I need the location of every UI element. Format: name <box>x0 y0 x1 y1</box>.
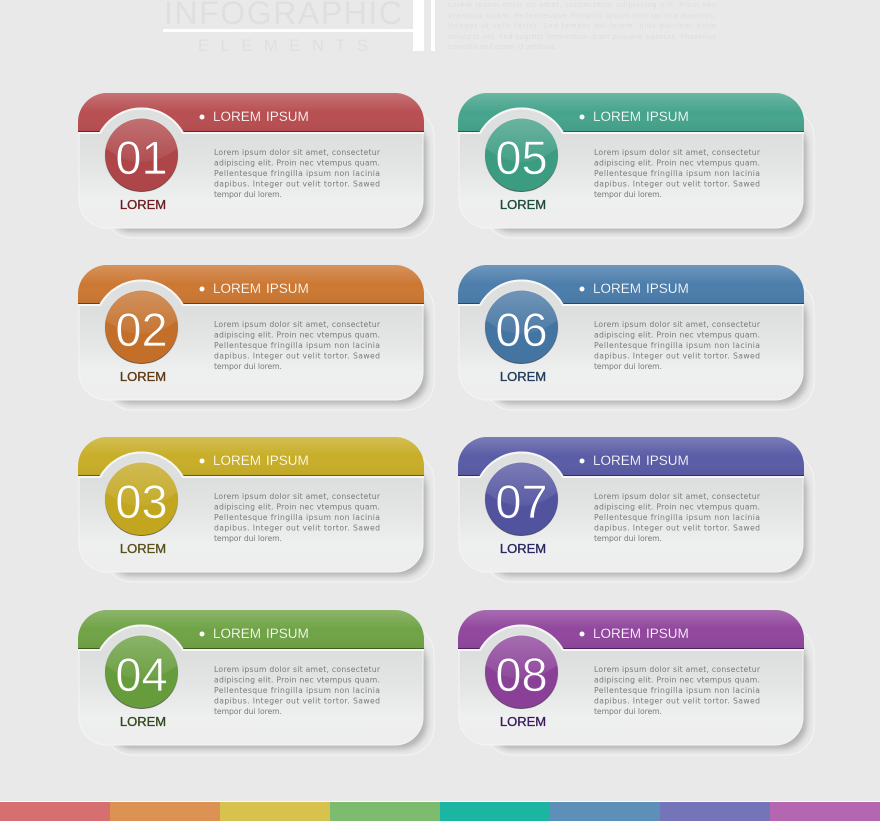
badge ring <box>480 282 563 306</box>
panel: 07 indigo: IPSUM <box>646 453 689 468</box>
header title <box>580 632 584 636</box>
intro paragraph <box>448 1 716 51</box>
panel: 02 orange: 02 <box>115 303 168 356</box>
body text: Pellentesque fringilla ipsum non lacinia <box>594 341 760 350</box>
badge ring <box>480 110 563 134</box>
body text: Pellentesque fringilla ipsum non lacinia <box>594 169 760 178</box>
body text: adipiscing elit. Proin nec vtempus quam. <box>594 676 760 684</box>
header band <box>458 93 804 132</box>
body text <box>594 665 761 716</box>
panel: 08 purple <box>458 610 814 755</box>
number badge <box>485 290 558 364</box>
panel: 04 green <box>78 610 434 755</box>
body text: Pellentesque fringilla ipsum non lacinia <box>214 513 380 522</box>
header band <box>78 437 424 476</box>
badge ring <box>100 454 183 478</box>
body text: Lorem ipsum dolor sit amet, consectetur <box>594 148 761 157</box>
body text: Pellentesque fringilla ipsum non lacinia <box>594 513 760 522</box>
panel: 02 orange: LOREM <box>213 281 261 296</box>
panel: 07 indigo <box>458 437 814 582</box>
body text: tempor dui lorem. <box>594 190 662 199</box>
body text: adipiscing elit. Proin nec vtempus quam. <box>594 330 760 340</box>
badge ring <box>480 627 563 651</box>
body text: Lorem ipsum dolor sit amet, consectetur <box>214 320 381 329</box>
panel: 02 orange: IPSUM <box>266 281 309 296</box>
body text: adipiscing elit. Proin nec vtempus quam. <box>214 158 380 168</box>
panel: 03 yellow <box>78 437 434 582</box>
number badge <box>105 636 178 708</box>
body text <box>594 320 761 371</box>
badge label: LOREM <box>120 541 166 556</box>
intro paragraph: volutpat vel. Sed sagittis fermentum diam posuere egestas. Phasellus <box>448 33 716 41</box>
badge label: LOREM <box>120 714 166 729</box>
body text: Lorem ipsum dolor sit amet, consectetur <box>214 148 381 157</box>
title block <box>163 0 716 55</box>
body text: Lorem ipsum dolor sit amet, consectetur <box>594 492 761 501</box>
body text <box>594 148 761 199</box>
body text: adipiscing elit. Proin nec vtempus quam. <box>594 158 760 168</box>
body text: Pellentesque fringilla ipsum non lacinia <box>214 686 380 695</box>
header band <box>78 265 424 304</box>
panel: 02 orange <box>78 265 434 410</box>
body text: adipiscing elit. Proin nec vtempus quam. <box>214 502 380 512</box>
number badge <box>485 118 558 192</box>
panel: 05 teal: IPSUM <box>646 109 689 124</box>
body text: dapibus. Integer out velit tortor. Sawed <box>594 696 760 706</box>
body text: adipiscing elit. Proin nec vtempus quam. <box>214 330 380 340</box>
panel: 01 red: 01 <box>115 131 168 184</box>
panel: 03 yellow: IPSUM <box>266 453 309 468</box>
body text <box>214 320 381 371</box>
body text: Lorem ipsum dolor sit amet, consectetur <box>594 665 761 674</box>
header band <box>458 610 804 649</box>
badge label: LOREM <box>120 369 166 384</box>
body text: dapibus. Integer out velit tortor. Sawed <box>214 352 380 360</box>
header title <box>200 632 204 636</box>
header band <box>78 93 424 132</box>
body text <box>594 492 761 543</box>
header title <box>200 286 204 292</box>
number badge <box>105 462 178 536</box>
body text: tempor dui lorem. <box>594 534 662 543</box>
body text: Pellentesque fringilla ipsum non lacinia <box>214 341 380 350</box>
panel: 01 red: IPSUM <box>266 109 309 124</box>
body text: tempor dui lorem. <box>594 362 662 371</box>
subtitle: elements: ELEMENTS <box>198 37 368 55</box>
panel: 01 red <box>78 93 434 238</box>
body text: dapibus. Integer out velit tortor. Sawed <box>214 696 380 706</box>
badge ring <box>100 110 183 134</box>
intro paragraph: vtempus quam. Pellentesque fringilla ipsum non lacinia dapibus. <box>448 12 716 20</box>
badge ring <box>100 627 183 651</box>
badge ring <box>480 454 563 478</box>
number badge <box>105 118 178 192</box>
badge label: LOREM <box>500 714 546 729</box>
panel: 01 red: LOREM <box>213 109 261 124</box>
intro paragraph: convallis sed quam id vehicula. <box>448 43 557 51</box>
badge ring <box>100 282 183 306</box>
panel: 06 blue: 06 <box>495 303 548 356</box>
panel: 06 blue: LOREM <box>593 281 641 296</box>
panel: 08 purple: 08 <box>495 648 548 701</box>
body text: adipiscing elit. Proin nec vtempus quam. <box>214 676 380 684</box>
number badge <box>105 290 178 364</box>
body text: tempor dui lorem. <box>214 707 282 716</box>
header title <box>580 458 584 464</box>
body text: adipiscing elit. Proin nec vtempus quam. <box>594 502 760 512</box>
body text: dapibus. Integer out velit tortor. Sawed <box>214 524 380 532</box>
number badge <box>485 636 558 708</box>
body text: tempor dui lorem. <box>594 707 662 716</box>
badge label: LOREM <box>500 369 546 384</box>
panel: 03 yellow: 03 <box>115 475 168 528</box>
panel: 05 teal: 05 <box>495 131 548 184</box>
panel: 07 indigo: 07 <box>495 475 548 528</box>
panel: 08 purple: IPSUM <box>646 626 689 641</box>
panel: 04 green: LOREM <box>213 626 261 641</box>
body text: Lorem ipsum dolor sit amet, consectetur <box>214 492 381 501</box>
panel: 05 teal <box>458 93 814 238</box>
body text <box>214 665 381 716</box>
body text: Lorem ipsum dolor sit amet, consectetur <box>594 320 761 329</box>
body text <box>214 492 381 543</box>
header band <box>458 265 804 304</box>
body text: Pellentesque fringilla ipsum non lacinia <box>594 686 760 695</box>
body text: dapibus. Integer out velit tortor. Sawed <box>594 352 760 360</box>
panel: 07 indigo: LOREM <box>593 453 641 468</box>
body text: tempor dui lorem. <box>214 534 282 543</box>
body text: dapibus. Integer out velit tortor. Sawed <box>594 180 760 188</box>
header title <box>200 458 204 464</box>
title rule <box>163 29 414 32</box>
panel: 03 yellow: LOREM <box>213 453 261 468</box>
badge label: LOREM <box>120 197 166 212</box>
panel: 04 green: 04 <box>115 648 168 701</box>
header title <box>580 286 584 292</box>
body text: dapibus. Integer out velit tortor. Sawed <box>594 524 760 532</box>
panel: 08 purple: LOREM <box>593 626 641 641</box>
header band <box>78 610 424 649</box>
white vertical bars <box>413 0 435 51</box>
body text: dapibus. Integer out velit tortor. Sawed <box>214 180 380 188</box>
bottom colour strip <box>0 801 880 821</box>
panel: 04 green: IPSUM <box>266 626 309 641</box>
header title <box>580 114 584 120</box>
intro paragraph: Lorem ipsum dolor sit amet, consectetur adipiscing elit. Proin nec <box>448 1 716 9</box>
panel: 06 blue: IPSUM <box>646 281 689 296</box>
body text: Lorem ipsum dolor sit amet, consectetur <box>214 665 381 674</box>
panel: 06 blue <box>458 265 814 410</box>
header title <box>200 114 204 120</box>
body text <box>214 148 381 199</box>
body text: Pellentesque fringilla ipsum non lacinia <box>214 169 380 178</box>
badge label: LOREM <box>500 541 546 556</box>
badge label: LOREM <box>500 197 546 212</box>
header band <box>458 437 804 476</box>
intro paragraph: Integer ut velit tortor. Sed tempor dui lorem, quis pulvinar enim <box>448 22 716 30</box>
body text: tempor dui lorem. <box>214 190 282 199</box>
body text: tempor dui lorem. <box>214 362 282 371</box>
panel: 05 teal: LOREM <box>593 109 641 124</box>
number badge <box>485 462 558 536</box>
